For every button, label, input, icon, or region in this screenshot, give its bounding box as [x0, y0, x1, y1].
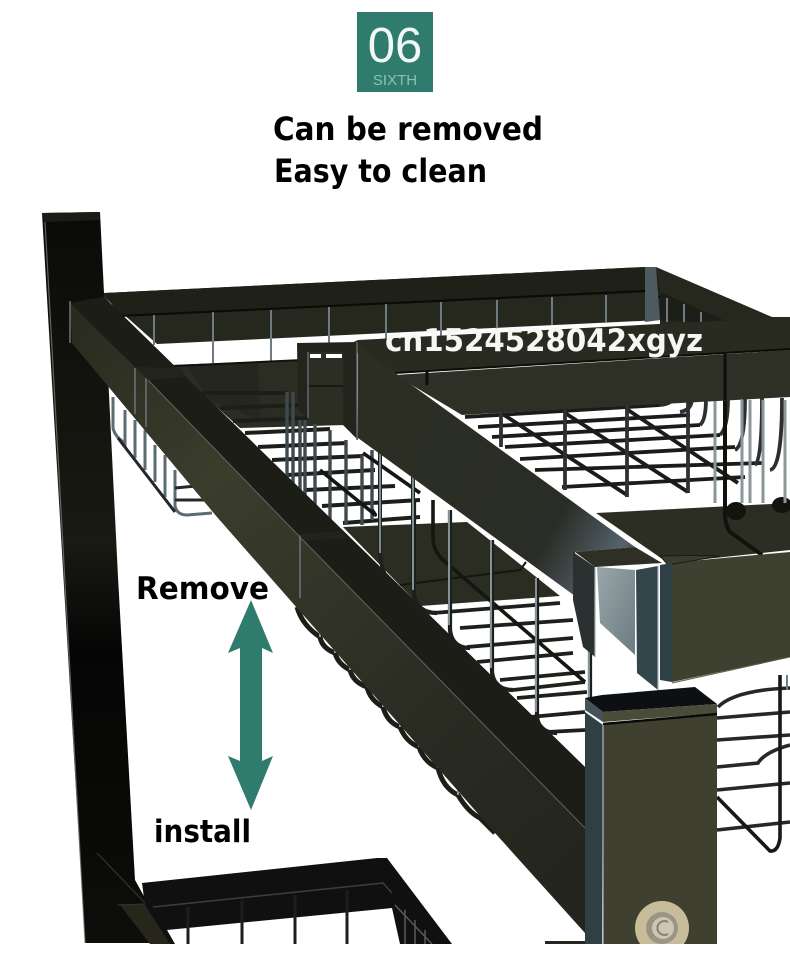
back basket wall	[104, 267, 790, 363]
badge: 06 sixth: SIXTH	[373, 72, 417, 89]
watermark text: cn1524528042xgyz	[385, 323, 703, 359]
label: install: install	[154, 814, 251, 850]
heading	[273, 110, 543, 190]
label: remove: Remove	[136, 571, 269, 607]
front post	[585, 687, 717, 954]
wire grid: upper right basket	[458, 358, 790, 563]
front wall of top basket	[345, 317, 790, 415]
diagonal beam of top basket	[358, 346, 635, 596]
middle basket inner wall	[170, 358, 345, 428]
badge: 06 sixth	[357, 12, 433, 92]
product photo: shelf rack	[0, 212, 790, 954]
hooks below rail and left basket wires	[113, 397, 495, 833]
heading: Can be removed	[273, 110, 543, 148]
long front rail	[70, 297, 585, 933]
badge: 06 sixth: 06	[368, 19, 422, 73]
middle basket floor	[343, 522, 560, 606]
bolt and washer	[635, 901, 689, 954]
wire grid: upper left basket	[203, 392, 420, 596]
left post	[42, 212, 172, 944]
lower basket	[142, 858, 585, 944]
arrow: remove and install	[228, 600, 273, 810]
right basket front panel	[660, 552, 790, 683]
heading: Easy to clean	[274, 152, 487, 190]
clip on beam end	[573, 547, 662, 690]
bracket on middle basket	[297, 342, 358, 440]
lower right wire basket	[717, 675, 790, 851]
wire grid: lower middle basket	[413, 500, 590, 733]
